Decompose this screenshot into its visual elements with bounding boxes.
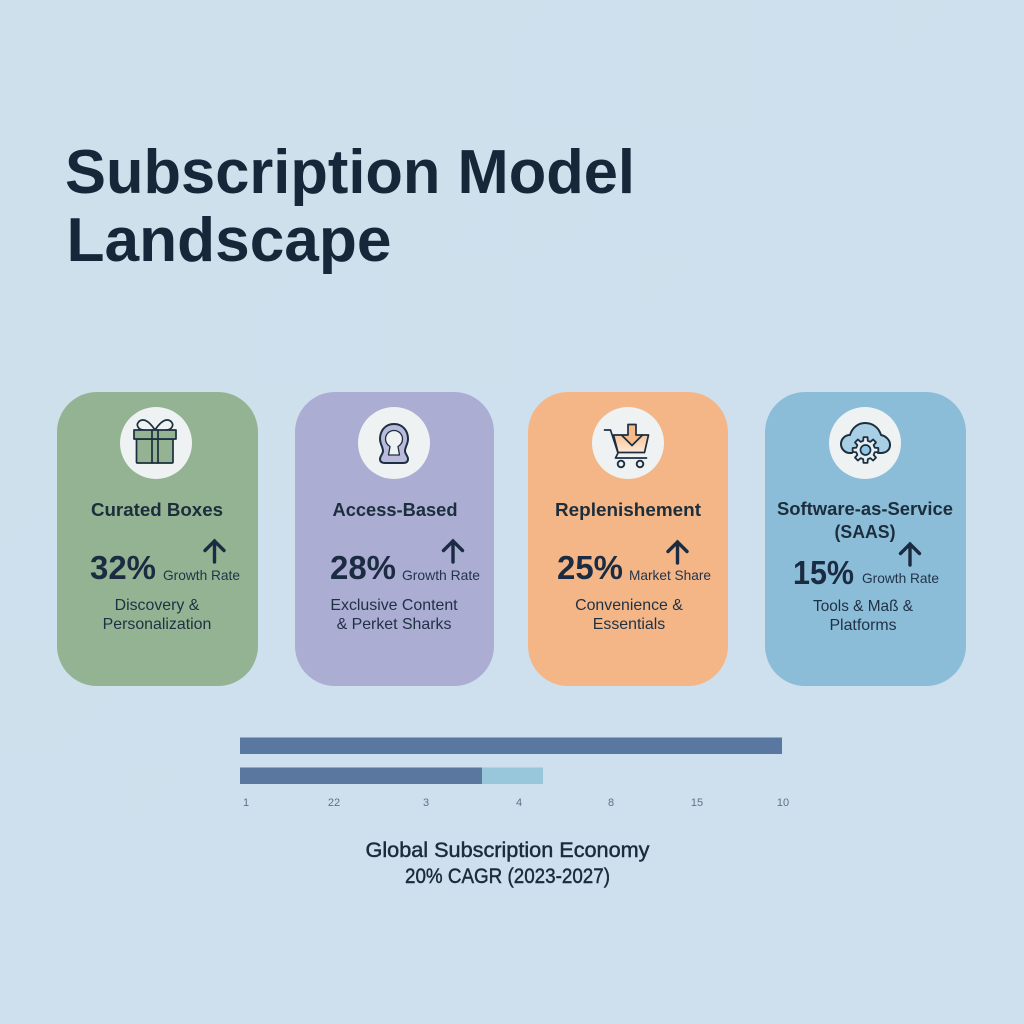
description: & Perket Sharks (337, 616, 451, 633)
heading: Replenishement (555, 499, 701, 520)
panel: access-based (295, 392, 494, 686)
footer caption: Global Subscription Economy (366, 839, 650, 862)
heading (777, 498, 953, 542)
bar: top (240, 738, 782, 754)
heading: Curated Boxes (91, 499, 223, 520)
description (330, 597, 458, 633)
axis labels: 8 (608, 797, 614, 809)
arrow: up (444, 541, 462, 562)
icon: cloud with gear (829, 407, 901, 479)
heading: (SAAS) (834, 521, 896, 542)
stat label: Growth Rate (862, 571, 939, 586)
description (813, 598, 913, 634)
stat: 15% (793, 555, 854, 592)
panel: replenishment (528, 392, 728, 686)
stat: 25% (557, 550, 623, 587)
description: Discovery & (115, 597, 200, 614)
arrow: up (668, 542, 687, 563)
arrow: up (900, 544, 920, 565)
description: Essentials (593, 616, 665, 633)
panel: curated boxes (57, 392, 258, 686)
axis labels: 22 (328, 797, 340, 809)
footer caption (366, 839, 650, 888)
heading: Software-as-Service (777, 498, 953, 519)
stat: 28% (330, 550, 396, 587)
icon: keyhole (358, 407, 430, 479)
axis labels (243, 797, 789, 809)
stat label: Growth Rate (163, 568, 240, 583)
panel: software-as-service (765, 392, 966, 686)
description: Personalization (103, 616, 211, 633)
description: Exclusive Content (330, 597, 458, 614)
icon: gift box (120, 407, 192, 479)
axis labels: 15 (691, 797, 703, 809)
arrow: up (205, 541, 224, 562)
title: Landscape (66, 206, 392, 275)
bar: bottom (240, 768, 543, 784)
bar chart (240, 738, 789, 809)
stat label: Market Share (629, 568, 711, 583)
stat label: Growth Rate (402, 568, 480, 583)
description: Convenience & (575, 597, 683, 614)
axis labels: 4 (516, 797, 522, 809)
icon: shopping cart (592, 407, 664, 479)
heading: Access-Based (332, 499, 458, 520)
axis labels: 3 (423, 797, 429, 809)
axis labels: 10 (777, 797, 789, 809)
footer caption: 20% CAGR (2023-2027) (405, 865, 610, 888)
stat: 32% (90, 550, 156, 587)
description (103, 597, 211, 633)
axis labels: 1 (243, 797, 249, 809)
description (575, 597, 683, 633)
description: Platforms (829, 617, 897, 634)
title: Subscription Model (65, 138, 635, 207)
title (65, 138, 635, 275)
description: Tools & Maß & (813, 598, 913, 615)
